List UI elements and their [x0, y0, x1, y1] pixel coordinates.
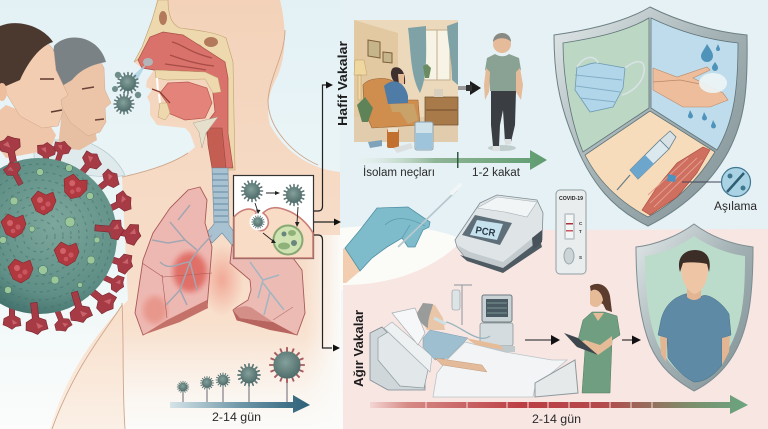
bronchial tree [152, 205, 212, 305]
first woman neck [0, 105, 56, 158]
epiglottis [193, 117, 218, 148]
inset arrows [255, 193, 298, 241]
person face [681, 256, 708, 294]
syringe [617, 131, 676, 190]
torso fade right [305, 235, 341, 429]
second woman hair [52, 38, 106, 86]
severe timeline arrow [370, 395, 748, 414]
IV stand [454, 285, 472, 325]
arrow: bed to nurse [525, 335, 560, 345]
swab stick [398, 190, 457, 247]
left wall [354, 20, 398, 117]
big coronavirus [0, 134, 143, 336]
dark base [460, 240, 542, 273]
windowsill plant [423, 64, 431, 78]
icon: vaccination badge [682, 168, 750, 196]
person shirt [658, 294, 731, 382]
armchair [363, 78, 420, 128]
arm muscle [642, 147, 710, 215]
growing viruses [183, 380, 287, 402]
chest redness [200, 244, 244, 316]
label: 1-2: 1-2 kakat [472, 167, 521, 179]
vent [532, 230, 542, 250]
virus copy [284, 184, 304, 206]
panel: severe cases background [343, 229, 768, 429]
screen [470, 220, 503, 240]
swab tip [452, 185, 460, 193]
panel: upper right background [340, 0, 768, 240]
PCR machine: PCR [474, 225, 497, 240]
water drops [688, 44, 720, 128]
exhaled virus particles [112, 63, 147, 114]
ventilator [480, 323, 513, 346]
entering virus [252, 216, 264, 228]
COVID test cassette: COVID-19 [559, 196, 583, 202]
prevention shield [554, 7, 747, 226]
hard palate [155, 70, 221, 93]
arrow: home to recovered [458, 81, 481, 95]
floor plant [357, 97, 373, 122]
label: isolation: İsolam neçları [363, 166, 435, 179]
COVID test cassette: C [579, 221, 583, 226]
connector arrows [314, 82, 341, 352]
second woman face [58, 53, 111, 136]
bed frame [370, 327, 425, 390]
larynx [207, 128, 226, 168]
first woman eye and mouth [40, 79, 62, 112]
nasal turbinates [165, 42, 214, 70]
nurse face [590, 290, 603, 307]
first woman face [4, 40, 68, 128]
front spikes over sphere [2, 159, 28, 188]
lower band [143, 300, 208, 335]
blanket [433, 342, 567, 397]
women figures [0, 23, 125, 177]
body outline [52, 30, 318, 429]
lid [477, 197, 537, 217]
label: vaccination: Aşılama [714, 201, 758, 213]
lamp [354, 60, 367, 100]
shield frame [554, 7, 747, 226]
lobe lines [142, 263, 212, 318]
floor [354, 117, 458, 142]
hands [653, 67, 728, 107]
injection point [667, 174, 676, 182]
pillow [392, 308, 425, 345]
forearm [343, 248, 360, 283]
label: incubation duration: 2-14 gün [212, 410, 261, 424]
figure: human body and airway [50, 0, 341, 429]
footrail [535, 360, 578, 397]
COVID test cassette: S [579, 255, 582, 260]
frontal sinus [159, 11, 167, 25]
inflammation [173, 252, 207, 292]
figure: nurse [564, 284, 620, 393]
clipboard [564, 333, 598, 355]
skull bone band [134, 0, 235, 170]
first woman ear [0, 83, 7, 101]
label: severe cases: Ağır Vakalar [351, 310, 366, 387]
window [408, 22, 458, 93]
recovered person shield [636, 224, 753, 391]
endosome pocket [250, 214, 266, 230]
monitor [482, 295, 512, 322]
panel: vaccination [585, 111, 715, 217]
body silhouette [50, 0, 340, 429]
illustration: home isolation room [354, 20, 458, 153]
sphenoid sinus [204, 37, 218, 47]
PCR machine [455, 195, 543, 273]
label: severe duration: 2-14 gün [532, 412, 581, 426]
nurse arm [574, 336, 612, 355]
panel: hand washing [651, 18, 738, 150]
label: mild cases: Hafif Vakalar [335, 41, 350, 126]
mild timeline arrow [360, 150, 547, 170]
right lung [230, 245, 305, 335]
sitting woman [384, 67, 418, 124]
torso fade bottom [124, 335, 341, 429]
wall pictures [368, 40, 380, 58]
infected cell [274, 226, 302, 254]
icon: swab and gloved hand [343, 185, 460, 283]
inset frame [234, 176, 314, 258]
patient upper hand [466, 338, 504, 350]
scrubs [578, 312, 620, 393]
person hair [679, 250, 710, 272]
second woman eye and mouth [82, 87, 104, 120]
tube [446, 322, 490, 338]
glove [345, 207, 430, 271]
patient head [417, 303, 445, 330]
back spikes [0, 134, 25, 169]
nurse hair [590, 284, 612, 312]
person neck [687, 288, 701, 300]
medicine table [368, 122, 433, 153]
lower body [457, 232, 542, 272]
surface spike clusters [31, 191, 56, 215]
hospital bed scene [370, 285, 578, 397]
mechanism inset [234, 176, 314, 258]
panel: mask [563, 18, 649, 152]
figure: recovered woman [484, 33, 523, 151]
teeth and lips [157, 78, 160, 103]
COVID test cassette: T [579, 229, 582, 234]
trachea [205, 168, 240, 245]
sphere [0, 158, 117, 314]
side table [425, 89, 458, 125]
virus above cell [242, 180, 262, 202]
COVID test cassette [556, 190, 586, 274]
nasal cavity and pharynx [138, 32, 233, 168]
patient gown [423, 330, 468, 360]
second woman neck [58, 110, 97, 150]
tongue and mouth [160, 82, 212, 120]
left lung [135, 187, 212, 335]
screen bezel [462, 215, 512, 245]
droplet in nose [143, 58, 153, 66]
first woman hair [0, 23, 53, 88]
arrow: nurse to recovered [622, 336, 641, 344]
soap bubble [699, 73, 727, 93]
sphere texture [0, 164, 111, 308]
second woman shirt [33, 140, 125, 177]
mask [575, 57, 644, 112]
incubation timeline [170, 347, 310, 413]
green bumps [0, 164, 100, 294]
lower jaw [158, 103, 170, 120]
bed side panel [378, 332, 428, 388]
mattress [384, 322, 432, 372]
swoosh: white band under hand [340, 226, 463, 290]
person arms [660, 336, 730, 365]
cell body [234, 208, 313, 258]
patient arm [435, 358, 487, 372]
